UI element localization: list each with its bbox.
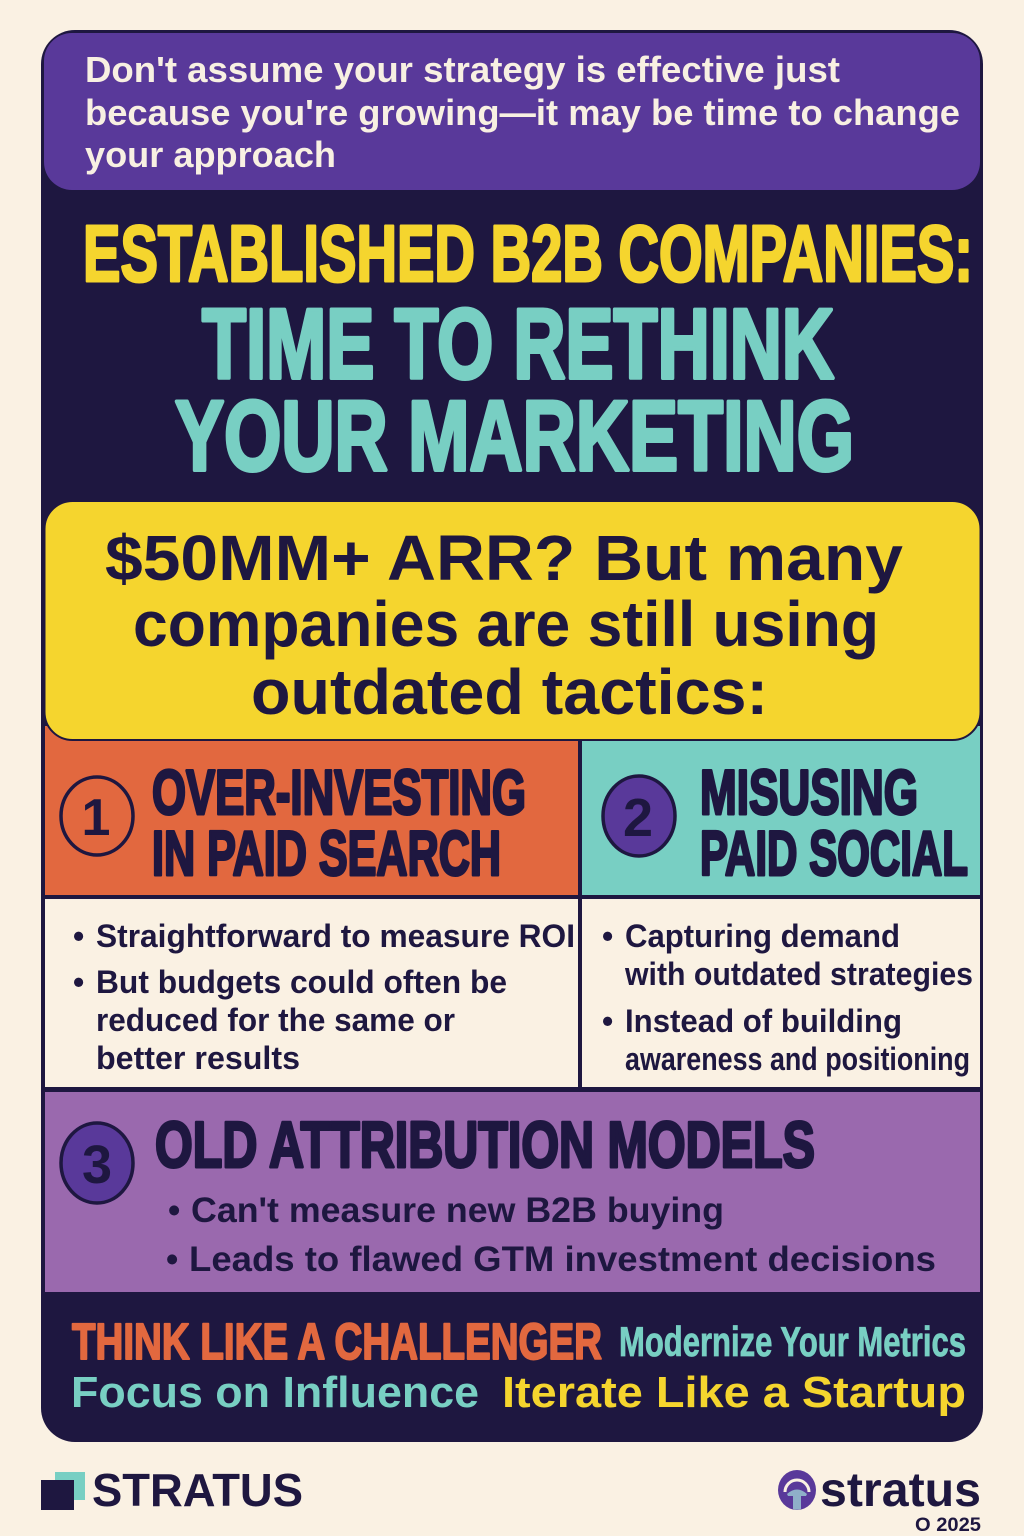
panel: section two header [582, 726, 980, 895]
panel: section one header [45, 726, 578, 895]
panel: intro banner: your approach [85, 134, 336, 175]
panel: key message: outdated tactics: [251, 656, 768, 728]
icon: number 3 [61, 1123, 133, 1203]
panel: section three: OLD ATTRIBUTION MODELS [155, 1108, 815, 1181]
icon: number 1 [61, 777, 133, 855]
panel: section two details: awareness and positioning [625, 1041, 970, 1077]
panel: section one details [45, 899, 578, 1087]
icon: number 2: 2 [623, 788, 653, 848]
panel: section two details: • [602, 1003, 613, 1039]
panel: key message: $50MM+ ARR? But many [105, 522, 903, 594]
panel: section three: Leads to flawed GTM investment decisions [189, 1240, 936, 1279]
footer call to action: Iterate Like a Startup [502, 1368, 966, 1417]
panel: intro banner [44, 33, 980, 190]
panel: intro banner: because you're growing—it may be time to change [85, 92, 960, 133]
panel: section three: • [168, 1191, 180, 1230]
panel: intro banner: Don't assume your strategy is effective just [85, 49, 840, 90]
panel: section one header: OVER-INVESTING [152, 758, 526, 828]
icon: number 2 [603, 776, 675, 856]
panel: section two details: with outdated strategies [624, 956, 973, 992]
title [83, 209, 973, 491]
copyright: O 2025 [915, 1515, 981, 1536]
logo: STRATUS wordmark: STRATUS [92, 1464, 303, 1516]
panel: section one details: better results [96, 1040, 300, 1076]
panel: section three: • [166, 1240, 178, 1279]
panel: key message [44, 501, 980, 740]
panel: section two details: • [602, 918, 613, 954]
panel: section three [45, 1092, 980, 1292]
panel: section one details: But budgets could often be [96, 964, 507, 1000]
footer call to action [71, 1313, 966, 1417]
panel: section one details: • [73, 964, 84, 1000]
footer call to action: THINK LIKE A CHALLENGER [72, 1313, 602, 1370]
panel: section two details: Instead of building [625, 1003, 902, 1039]
panel: section two details [582, 899, 980, 1087]
panel: key message: companies are still using [133, 588, 879, 660]
panel: section one details: Straightforward to measure ROI [96, 918, 575, 954]
panel: section one header: IN PAID SEARCH [152, 819, 501, 889]
panel: section two details: Capturing demand [625, 918, 900, 954]
icon: number 1: 1 [82, 789, 110, 847]
logo: stratus lowercase: stratus [820, 1464, 981, 1517]
panel: section three: Can't measure new B2B buying [191, 1191, 724, 1230]
panel: section one details: • [73, 918, 84, 954]
icon: number 3: 3 [82, 1135, 112, 1195]
panel: section two header: MISUSING [700, 758, 918, 828]
footer call to action: Focus on Influence [71, 1368, 479, 1417]
panel: section one details: reduced for the same or [96, 1002, 455, 1038]
